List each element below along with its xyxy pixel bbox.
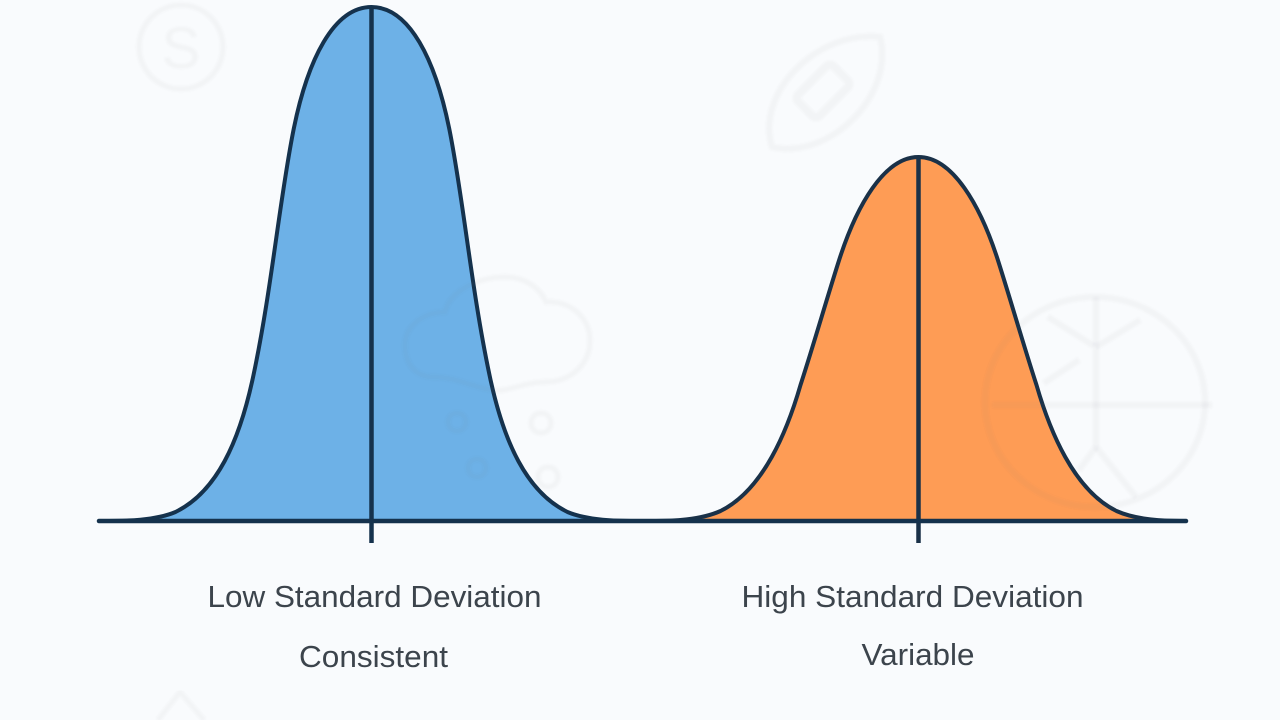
label: high standard deviation: High Standard Deviation — [742, 579, 1084, 614]
blue mean line — [369, 8, 374, 543]
watermark icon: bottom partial — [158, 692, 204, 720]
orange curve outline — [650, 157, 1186, 521]
high deviation bell curve — [650, 157, 1186, 543]
label: variable: Variable — [862, 637, 974, 672]
label: low standard deviation: Low Standard Deviation — [208, 579, 542, 614]
orange mean line — [916, 157, 921, 543]
watermark icon: cloud with rain — [405, 277, 590, 487]
watermark icon: football — [769, 36, 882, 149]
watermark icon: dollar coin: S — [162, 16, 200, 81]
blue curve outline — [102, 7, 642, 521]
orange curve fill — [650, 157, 1186, 521]
label: consistent: Consistent — [299, 639, 448, 674]
blue curve fill — [102, 7, 642, 521]
low deviation bell curve — [102, 7, 642, 543]
watermark icon: basketball — [985, 297, 1212, 507]
watermark icon: dollar coin — [139, 5, 223, 89]
baseline axis — [99, 519, 1186, 523]
